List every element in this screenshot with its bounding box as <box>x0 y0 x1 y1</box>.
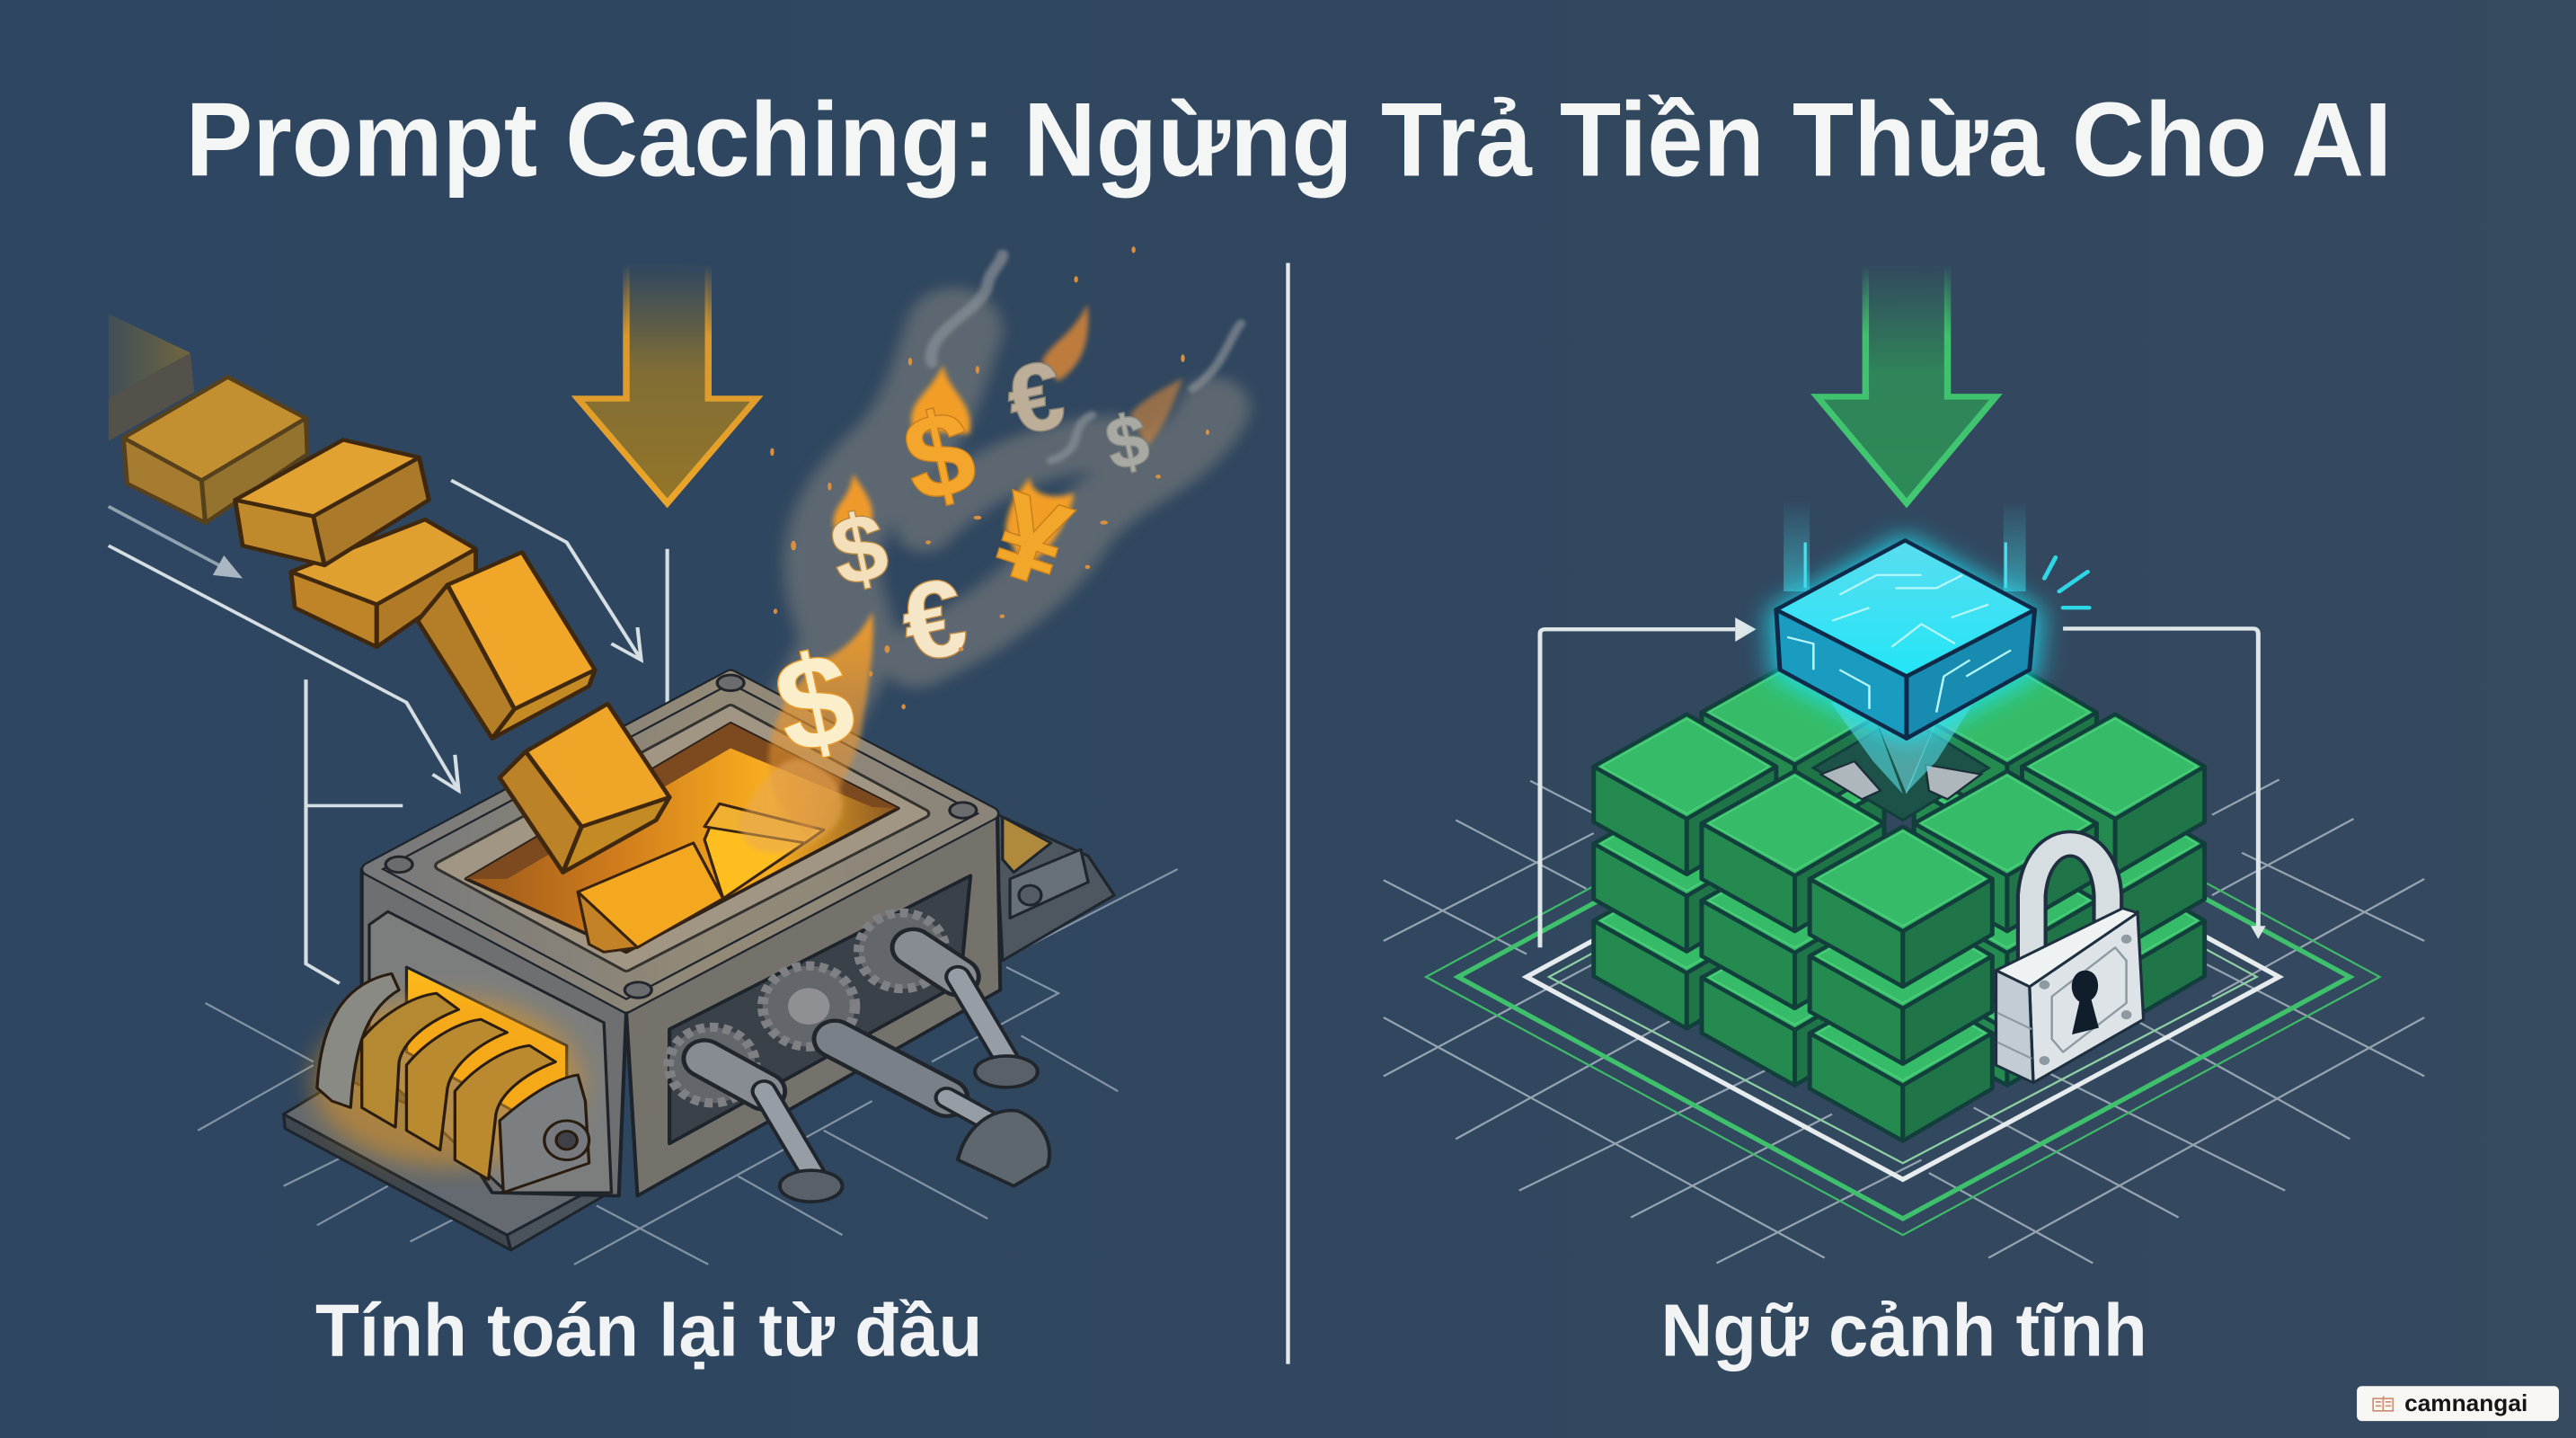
panel: left, recalculating from scratch <box>109 246 1241 1372</box>
block layer: top front <box>1594 715 2205 987</box>
euro: € <box>891 555 976 686</box>
smoke wisps <box>931 255 1241 461</box>
flame: grey dollar <box>1130 378 1182 447</box>
flame: main column behind dollar <box>769 611 873 839</box>
dollar large: $ <box>764 623 865 782</box>
flames <box>739 304 1182 853</box>
chip glow <box>1769 534 2042 745</box>
block layer: bottom <box>1594 814 2205 1141</box>
caption: right: Ngữ cảnh tĩnh <box>1661 1291 2147 1372</box>
gold bar stream <box>109 314 669 873</box>
glowing cache chip <box>1776 540 2035 739</box>
machine top rim <box>369 677 991 1007</box>
yen: ¥ <box>980 466 1084 612</box>
panel: right, static context <box>1384 264 2424 1372</box>
dollar grey: $ <box>1100 399 1155 486</box>
smoke plume <box>806 330 1215 775</box>
hopper opening with glow <box>466 723 899 952</box>
title: Prompt Caching: Ngừng Trả Tiền Thừa Cho AI <box>186 81 2392 199</box>
keyhole <box>2072 971 2099 1034</box>
dollar orange: $ <box>893 384 986 527</box>
gears <box>668 913 945 1103</box>
block layer: middle <box>1594 737 2205 1064</box>
caption: left: Tính toán lại từ đầu <box>315 1291 982 1372</box>
icon: open book <box>2373 1396 2393 1411</box>
machine body <box>362 677 1000 1196</box>
piston rods <box>704 947 1010 1179</box>
chip sparks <box>2044 557 2089 608</box>
bar 4 <box>418 552 595 739</box>
bar: faded <box>109 314 194 441</box>
flame: euro <box>1041 304 1088 381</box>
padlock <box>1996 844 2144 1083</box>
base platform diamonds <box>1426 719 2379 1235</box>
watermark text: camnangai <box>2404 1389 2527 1416</box>
sparks <box>770 246 1209 709</box>
arrow: green down arrow <box>1817 264 1996 503</box>
guide arrows <box>109 480 668 983</box>
shredder rollers <box>317 973 589 1193</box>
central socket <box>1813 715 1988 820</box>
arrow: orange down arrow <box>578 264 757 503</box>
watermark badge <box>2357 1386 2559 1421</box>
shackle <box>2032 844 2108 961</box>
stack of green blocks <box>1594 660 2205 1141</box>
hopper inner wall <box>466 723 899 879</box>
illustration: locked cube stack with cache chip <box>1384 264 2424 1263</box>
dollar small: $ <box>822 492 897 607</box>
shredder front slot <box>369 911 611 1193</box>
illustration: gold bars fed into shredder machine <box>109 255 1241 1265</box>
machine right face <box>626 813 1000 1196</box>
loop arrow: left <box>1540 617 1756 947</box>
machine rear conveyor <box>995 813 1114 961</box>
currency symbols burning <box>764 341 1155 782</box>
flame: over pale dollar <box>834 474 872 529</box>
machine left face <box>362 869 626 1196</box>
floor grid lines <box>198 869 1178 1265</box>
shredder glow <box>314 997 581 1167</box>
gears and pistons <box>668 913 1049 1202</box>
bar 5 <box>500 704 669 873</box>
floor grid lines <box>1384 779 2424 1263</box>
divider <box>1286 263 1290 1364</box>
bar 2 <box>235 439 429 565</box>
cyan beams <box>1784 500 2026 794</box>
bar 3 <box>291 519 476 647</box>
bars inside the hopper <box>578 803 824 952</box>
bar 1 <box>123 377 307 523</box>
euro grey: € <box>998 341 1073 456</box>
flame: yen <box>1005 476 1075 567</box>
rim bolts <box>385 675 977 998</box>
lock body <box>2030 911 2144 1083</box>
loop arrow: right <box>2063 628 2266 939</box>
machine base plate <box>284 1078 604 1250</box>
heat from hopper <box>739 759 843 853</box>
block layer: top back <box>1702 660 2096 820</box>
flame: over orange dollar <box>911 365 970 434</box>
